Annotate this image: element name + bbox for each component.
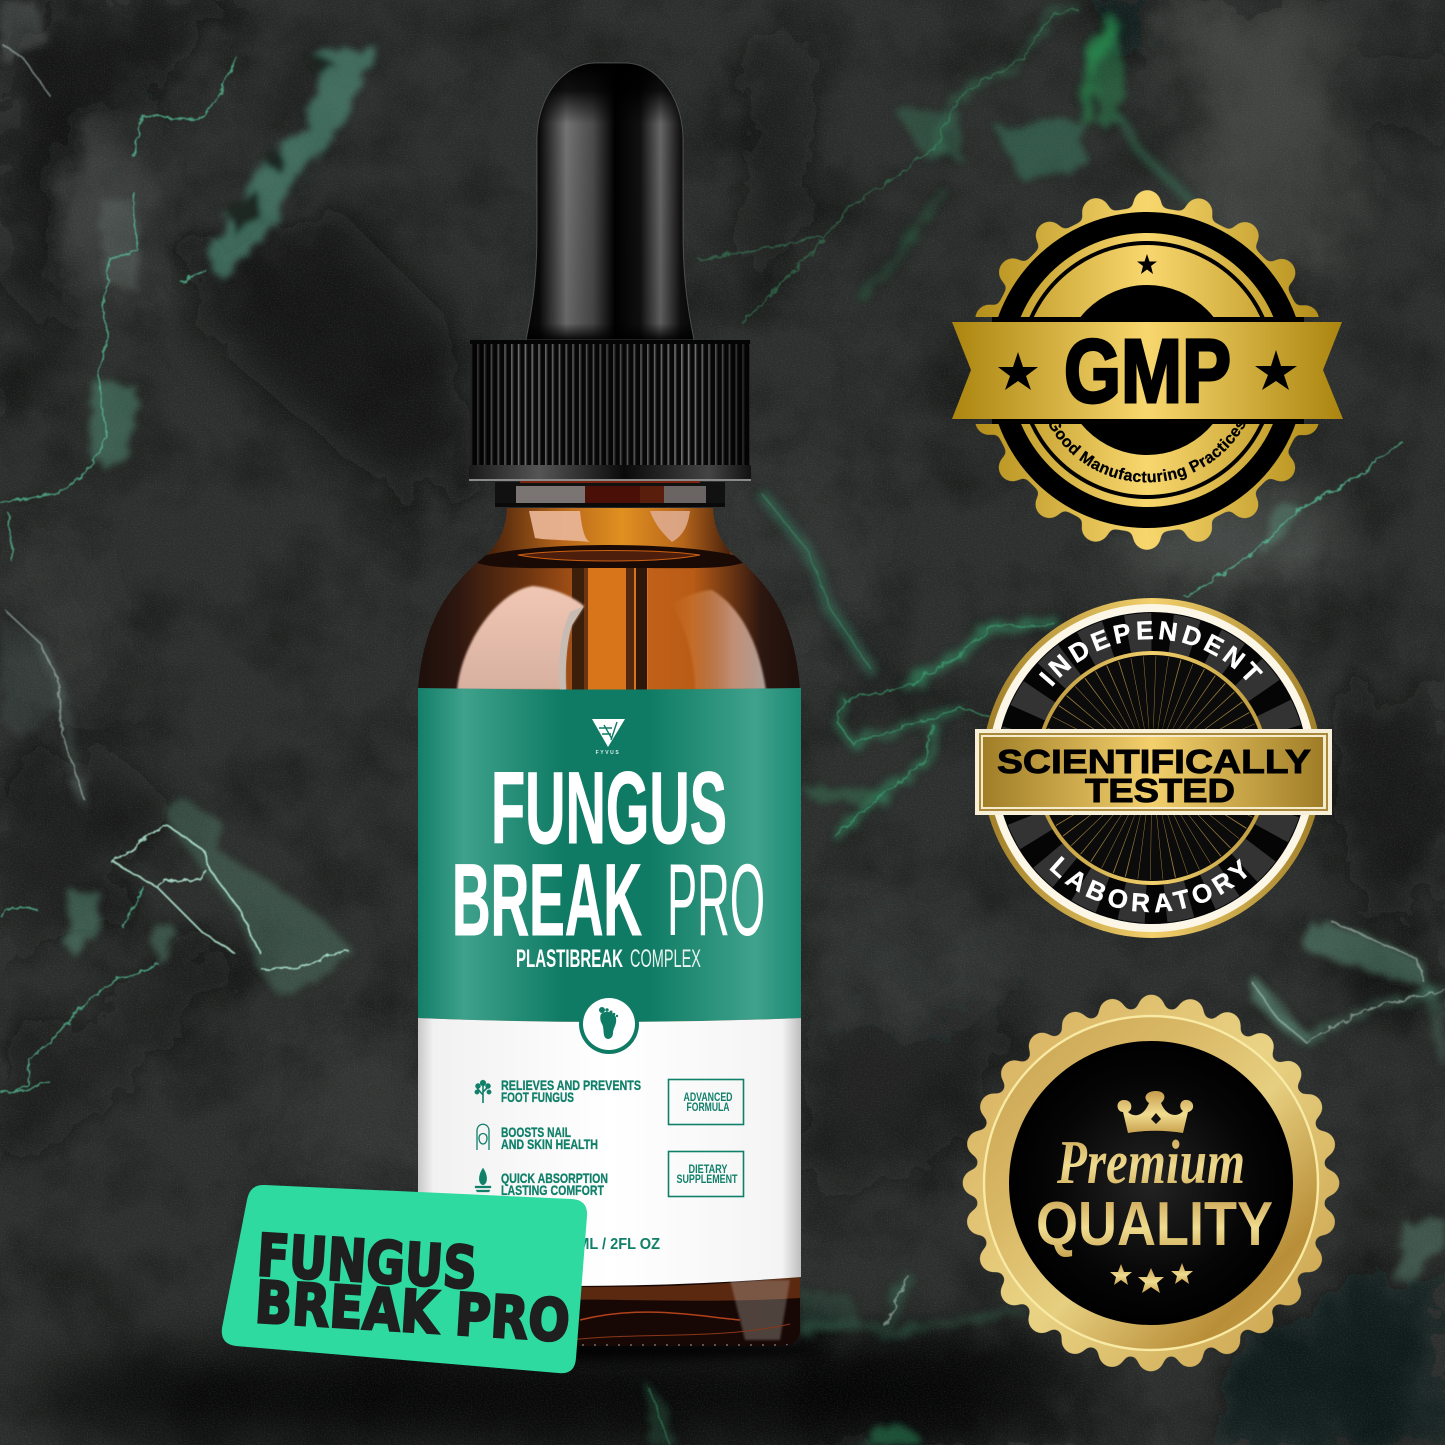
sticker: FUNGUS BREAK PRO: [222, 1185, 587, 1373]
arc text: LABORATORY: [1027, 840, 1277, 912]
plaque text: SCIENTIFICALLY: [997, 743, 1311, 780]
bottle glass body: [418, 508, 800, 1348]
badge: Scientifically Tested: TESTED: [1085, 772, 1235, 809]
box: advanced formula: ADVANCED: [684, 1090, 733, 1104]
dropper cap: [469, 340, 751, 481]
sticker: FUNGUS BREAK PRO: BREAK PRO: [253, 1268, 572, 1355]
badge: GMP seal: [952, 190, 1343, 550]
badge: Scientifically Tested: [975, 598, 1332, 938]
benefit: boosts nail and skin health: AND SKIN HEALTH: [501, 1136, 598, 1152]
benefit: relieves and prevents foot fungus: RELIEVES AND PREVENTS: [501, 1077, 641, 1093]
benefit: quick absorption lasting comfort: [475, 1168, 608, 1198]
subtitle: PLASTIBREAK COMPLEX: COMPLEX: [630, 945, 701, 973]
box: advanced formula: FORMULA: [686, 1100, 730, 1114]
bottle label: white panel: [418, 994, 801, 1286]
script: Premium: Premium: [1056, 1129, 1245, 1197]
badge: Premium Quality: [976, 1008, 1326, 1358]
star: left: [998, 352, 1038, 390]
logo: FYVUS: [592, 719, 625, 756]
box: advanced formula: [668, 1080, 744, 1124]
GMP title: GMP: [1064, 322, 1231, 422]
banner: [952, 322, 1343, 419]
benefit: boosts nail and skin health: BOOSTS NAIL: [501, 1124, 571, 1140]
icon: foot badge: [579, 994, 639, 1054]
seal body: [981, 204, 1313, 536]
sticker: FUNGUS BREAK PRO: FUNGUS: [255, 1221, 479, 1302]
plaque: [975, 729, 1332, 815]
benefit: relieves and prevents foot fungus: FOOT FUNGUS: [501, 1089, 574, 1105]
bottle label: green panel: [418, 688, 801, 1022]
ring segments: [1016, 632, 1288, 904]
arc caption: [1046, 420, 1248, 482]
star: right: [1255, 350, 1297, 390]
bottle base shadow: [400, 1340, 820, 1360]
star: top: [1137, 254, 1157, 274]
neck ring: [495, 480, 725, 507]
arc text: INDEPENDENT: [1033, 639, 1271, 720]
title: BREAK: BREAK: [452, 843, 642, 957]
sunburst rays: [1090, 706, 1214, 830]
logo: FYVUS: FYVUS: [596, 750, 620, 756]
box: dietary supplement: SUPPLEMENT: [676, 1172, 738, 1186]
benefit: boosts nail and skin health: [477, 1124, 598, 1152]
badge: GMP seal: Good Manufacturing Practices: [1049, 424, 1246, 483]
badge: Scientifically Tested: INDEPENDENT: [1038, 620, 1264, 687]
title: QUALITY: QUALITY: [1036, 1190, 1273, 1259]
box: dietary supplement: [668, 1152, 744, 1196]
title: FUNGUS: FUNGUS: [491, 751, 727, 865]
benefit: relieves and prevents foot fungus: [475, 1077, 641, 1105]
subtitle: PLASTIBREAK COMPLEX: PLASTIBREAK: [516, 945, 623, 973]
benefit: quick absorption lasting comfort: QUICK ABSORPTION: [501, 1170, 608, 1186]
bottle label: green panel: PRO: [667, 843, 765, 957]
benefit: quick absorption lasting comfort: LASTING COMFORT: [501, 1182, 604, 1198]
box: dietary supplement: DIETARY: [688, 1162, 728, 1176]
stars: [1110, 1263, 1193, 1293]
volume: 60ML / 2FL OZ: 60ML / 2FL OZ: [561, 1236, 660, 1253]
badge: Scientifically Tested: LABORATORY: [1050, 856, 1247, 912]
icon: crown: [1118, 1091, 1193, 1133]
product: amber dropper bottle: [400, 63, 820, 1360]
icon: dropper bulb: [526, 63, 694, 340]
